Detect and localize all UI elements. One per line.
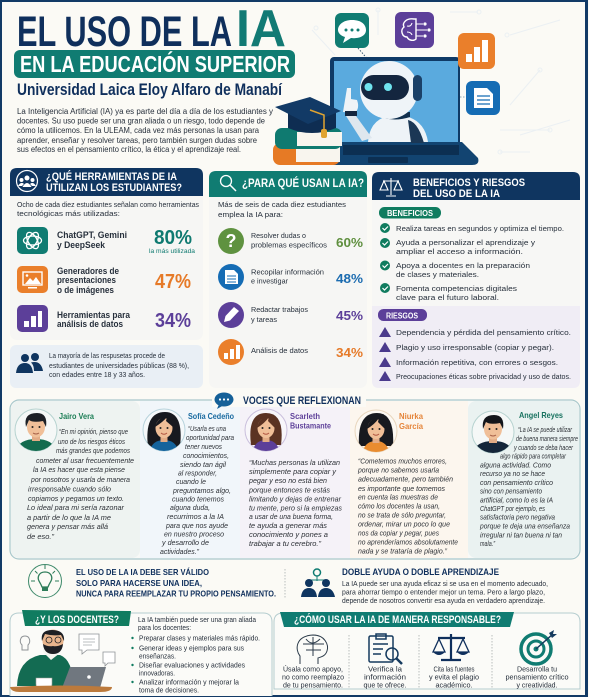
panel header [209, 171, 367, 197]
avatar [472, 411, 514, 456]
quote: uno de los riesgos éticos [58, 437, 125, 446]
section: riesgos: Dependencia y pérdida del pensamiento crítico. [396, 328, 571, 337]
row: recopilar: Recopilar información [251, 270, 324, 276]
quote: artificial, como lo es la IA [480, 496, 553, 504]
quote: alguna actividad. Como [480, 460, 551, 470]
quote: “Cometemos muchos errores, [358, 456, 447, 466]
icon: document [466, 81, 500, 115]
quote: Lo ideal para mi sería razonar [27, 503, 124, 512]
quote: satisfactoria pero negativa [480, 512, 555, 522]
row: análisis: Herramientas para [57, 310, 130, 320]
quote: “En mi opinión, pienso que [59, 427, 128, 436]
quote: preguntamos algo, [172, 486, 231, 495]
quote: en cuenta las muestras de [358, 492, 438, 502]
row: generadores: o de imágenes [57, 285, 114, 295]
icon: two people [301, 569, 335, 597]
avatar [245, 409, 287, 454]
quote: de eso.” [27, 532, 54, 541]
quote: con pensamiento crítico [480, 478, 553, 487]
text and bullet list: Diseñar evaluaciones y actividades [139, 662, 245, 670]
intro text [218, 200, 346, 219]
intro paragraph: sus efectos en el pensamiento crítico, la ética y el aprendizaje real. [17, 145, 241, 154]
avatar [355, 410, 397, 455]
row: ChatGPT: la más utilizada [149, 248, 195, 255]
item: cita las fuentes: Cita las fuentes [434, 664, 475, 674]
text: NUNCA PARA REEMPLAZAR TU PROPIO PENSAMIENTO. [76, 588, 276, 598]
name: Angel Reyes [519, 410, 563, 420]
text and bullet list: Generar ideas y ejemplos para sus [139, 646, 244, 652]
row: redactar: Redactar trabajos [251, 307, 309, 314]
section heading [214, 392, 361, 409]
row: análisis de datos [218, 339, 363, 365]
quote: ordenar, mirar un poco lo que [358, 520, 450, 528]
illustration: laptop, robot, books and app icons [273, 8, 570, 165]
name: García [399, 421, 423, 431]
row: resolver dudas: problemas específicos [251, 242, 328, 250]
quote: mala.” [480, 539, 495, 548]
quote: recurrimos a la IA [167, 512, 224, 521]
row: ChatGPT: 80% [154, 227, 192, 249]
text [342, 567, 548, 605]
quote: genera y pensar más allá [27, 522, 108, 531]
panel header: herramientas: UTILIZAN LOS ESTUDIANTES? [46, 182, 182, 194]
item: cita las fuentes: y evita el plagio [429, 672, 479, 682]
section: beneficios: de clases y materiales. [396, 270, 479, 279]
quote: limitando y dejas de entrenar [249, 494, 341, 504]
quote [248, 458, 342, 548]
intro text: Ocho de cada diez estudiantes señalan como herramientas [17, 200, 199, 209]
intro text: tecnológicas más utilizadas: [17, 209, 120, 218]
intro paragraph: docentes. Su uso puede ser una gran aliada o un riesgo, todo depende de [17, 116, 266, 126]
text: EL USO DE LA IA DEBE SER VÁLIDO [76, 567, 209, 577]
avatar [15, 409, 57, 454]
quote [357, 456, 458, 556]
illustration: teacher at laptop [10, 630, 115, 692]
section: beneficios: Apoya a docentes en la preparación [396, 261, 530, 270]
item: verifica la información: información [364, 672, 406, 682]
intro paragraph: cómo la utilicemos. En la ULEAM, cada vez más personas la usan para [17, 126, 260, 135]
section: beneficios: Fomenta competencias digitales [396, 284, 517, 293]
icon: laptop [322, 57, 478, 165]
row: generadores: Generadores de [57, 266, 119, 276]
row: recopilar: e investigar [251, 278, 289, 286]
row: análisis: 34% [155, 310, 191, 332]
quote: cuando le [176, 477, 206, 486]
quote: tener nuevos [185, 442, 222, 451]
quote: “Muchas personas la utilizan [249, 458, 340, 467]
item: pensamiento crítico [506, 630, 568, 690]
intro paragraph: La Inteligencia Artificial (IA) ya es parte del día a día de los estudiantes y [17, 107, 273, 116]
section heading: VOCES QUE REFLEXIONAN [243, 395, 361, 407]
row: generadores: 47% [155, 271, 191, 293]
section: riesgos: Información repetitiva, con errores o sesgos. [396, 358, 558, 367]
quote: pegar y eso no está bien [248, 476, 327, 485]
row: recopilar: 48% [336, 271, 363, 286]
text and bullet list: Preparar clases y materiales más rápido. [139, 636, 260, 642]
icon: chat [335, 13, 369, 48]
item: úsala como apoyo: no como reemplazo [282, 672, 344, 682]
quote: cómo los docentes la usan, [358, 502, 440, 510]
icon: light bulb [28, 564, 62, 598]
testimonial: Niurka García [355, 410, 458, 556]
panel header: ¿PARA QUÉ USAN LA IA? [242, 175, 364, 190]
section: beneficios: Ayuda a personalizar el aprendizaje y [396, 238, 535, 247]
quote: siendo tan ágil [180, 460, 226, 469]
quote: conocimientos, [183, 451, 229, 460]
text and bullet list: para los docentes: [138, 625, 191, 632]
name: Bustamante [290, 420, 331, 430]
panel header: DEL USO DE LA IA [413, 188, 500, 200]
item: úsala como apoyo [282, 635, 344, 690]
item: pensamiento crítico: pensamiento crítico [506, 672, 568, 682]
intro paragraph [17, 107, 273, 154]
section: riesgos [372, 306, 580, 388]
section: beneficios: clave para el futuro laboral. [396, 293, 499, 302]
row: análisis de datos: Análisis de datos [251, 348, 309, 355]
quote: cometer al usar frecuentemente [36, 456, 134, 465]
quote: irregular ni tan buena ni tan [480, 530, 562, 540]
panel: beneficios y riesgos [372, 172, 580, 388]
text: DOBLE AYUDA O DOBLE APRENDIZAJE [342, 567, 499, 577]
panel header: BENEFICIOS Y RIESGOS [413, 177, 525, 189]
section: riesgos: RIESGOS [386, 312, 419, 320]
quote: al responder, [178, 468, 217, 478]
callout: perfil de respuestas [10, 345, 203, 388]
quote: y desarrollo de [161, 538, 209, 547]
panel header [372, 172, 580, 200]
item: úsala como apoyo: Úsala como apoyo, [283, 664, 343, 674]
banner: ¿Y LOS DOCENTES? [35, 614, 119, 626]
text and bullet list: La IA también puede ser una gran aliada [138, 617, 256, 624]
quote: conocimiento y pones a [249, 530, 328, 539]
panel header: herramientas: ¿QUÉ HERRAMIENTAS DE IA [46, 170, 177, 183]
icon: brain circuit [395, 12, 434, 48]
quote: copiamos y pegamos un texto. [28, 494, 124, 503]
item: verifica la información: Verifica la [368, 664, 402, 674]
row: resolver dudas: 60% [336, 235, 363, 250]
text and bullet list: enseñanzas. [139, 654, 176, 660]
quote: es importante que tomemos [358, 484, 445, 493]
section: beneficios: Realiza tareas en segundos y optimiza el tiempo. [396, 224, 564, 233]
title block [14, 0, 295, 99]
quote: adecuadamente, pero también [358, 474, 453, 484]
quote: por nosotros y usarla de manera [30, 475, 130, 484]
panel: y los docentes [10, 610, 272, 696]
quote: a usar de una buena forma, [249, 512, 333, 521]
text [49, 351, 189, 379]
intro text: Más de seis de cada diez estudiantes [218, 200, 346, 209]
quote: te ayuda a generar más [249, 521, 327, 530]
section: beneficios: BENEFICIOS [387, 209, 434, 218]
name [290, 411, 331, 430]
text: La IA puede ser una ayuda eficaz si se usa en el momento adecuado, [342, 581, 548, 588]
row: análisis de datos: 34% [336, 345, 363, 360]
text and bullet list [131, 617, 260, 694]
panel: cómo usar la IA de manera responsable [274, 612, 580, 690]
quote: oportunidad para [186, 433, 234, 442]
banner [22, 610, 131, 626]
panel: para qué usan la IA [209, 171, 367, 388]
panel header: herramientas [10, 168, 203, 196]
quote: nada y se trataría de plagio.” [358, 546, 447, 556]
subtitle pill: EN LA EDUCACIÓN SUPERIOR [20, 50, 290, 77]
quote: no aprenderíamos absolutamente [358, 538, 458, 546]
quote: más grandes que podemos [56, 446, 130, 455]
text [76, 567, 276, 598]
name: Niurka [399, 411, 423, 421]
item: úsala como apoyo: de tu pensamiento. [283, 680, 343, 690]
quote: cuando tenemos [172, 494, 224, 504]
quote: recurso ya no se hace [480, 469, 545, 478]
avatar [143, 409, 185, 454]
item: cita las fuentes: académico. [436, 680, 472, 690]
icon: people [16, 353, 43, 373]
row: recopilar [218, 264, 363, 290]
row: ChatGPT [17, 227, 195, 255]
text: depende de nosotros convertir esa ayuda en verdadero aprendizaje. [342, 598, 545, 605]
row: resolver dudas: ? [226, 231, 236, 251]
quote: porque te deja una enseñanza [479, 522, 570, 530]
quote [479, 425, 578, 548]
panel: voces que reflexionan [10, 392, 580, 559]
text and bullet list: toma de decisiones. [139, 688, 199, 694]
row: análisis [17, 305, 191, 332]
quote: algo rápido para completar [500, 452, 566, 460]
row: resolver dudas: Resolver dudas o [251, 233, 306, 240]
quote: “Usarla es una [188, 424, 226, 433]
text and bullet list: innovadoras. [139, 670, 175, 678]
quote: trabajar a tu cerebro.” [249, 539, 321, 548]
item: pensamiento crítico: Desarrolla tu [517, 664, 557, 674]
title: EL USO DE LA IA: IA [236, 0, 286, 58]
row: redactar: 45% [336, 308, 363, 323]
item: pensamiento crítico: y creatividad. [516, 680, 558, 690]
row: ChatGPT: ChatGPT, Gemini [57, 230, 127, 240]
quote [27, 427, 134, 541]
university name: Universidad Laica Eloy Alfaro de Manabí [17, 80, 283, 99]
row: redactar [218, 302, 363, 328]
banner [280, 612, 514, 627]
item: verifica la información: que te ofrece. [364, 680, 406, 690]
section: riesgos: Preocupaciones éticas sobre privacidad y uso de datos. [396, 372, 571, 381]
quote: simplemente para copiar y [249, 467, 337, 476]
section: riesgos: Plagio y uso irresponsable (copiar y pegar). [396, 343, 554, 352]
row: resolver dudas [218, 228, 363, 254]
quote: porque no sabemos usarla [357, 466, 439, 474]
testimonial: Angel Reyes [472, 410, 578, 548]
quote: alguna duda, [170, 503, 210, 512]
intro paragraph: aprender, enseñar y resolver tareas, pero también surgen dudas sobre [17, 136, 258, 145]
section: beneficios [379, 207, 564, 302]
quote: nos da copiar y pegar, pues [358, 528, 439, 538]
banner: ¿CÓMO USAR LA IA DE MANERA RESPONSABLE? [294, 613, 501, 626]
item: verifica la información [364, 634, 406, 690]
quote: la IA es hacer que esta piense [33, 465, 125, 474]
intro text: emplea la IA para: [218, 210, 283, 219]
row: análisis: análisis de datos [57, 319, 123, 329]
text: SOLO PARA HACERSE UNA IDEA, [76, 578, 202, 588]
quote: actividades.” [160, 547, 199, 556]
name [399, 411, 423, 431]
tip: uso válido [28, 564, 276, 598]
icon: graduation cap and books [273, 97, 342, 165]
quote: no se trata de sólo preguntar, [358, 510, 446, 520]
text and bullet list: Analizar información y mejorar la [139, 680, 239, 686]
row: generadores [17, 266, 191, 295]
testimonial: Sofía Cedeño [143, 409, 234, 556]
quote: irresponsable cuando sólo [28, 484, 111, 494]
text: con edades entre 18 y 33 años. [49, 370, 145, 379]
title: EL USO DE LA IA: EL USO DE LA [17, 8, 232, 56]
icon: robot [343, 61, 428, 143]
testimonial: Jairo Vera [15, 409, 134, 541]
text: para ahorrar tiempo o entender mejor un tema. Pero a largo plazo, [342, 590, 545, 596]
name: Scarleth [290, 411, 320, 421]
quote: porque entonces te estás [248, 486, 330, 494]
name: Sofía Cedeño [188, 411, 234, 421]
row: ChatGPT: y DeepSeek [57, 240, 105, 250]
quote: sino con pensamiento [480, 486, 542, 496]
quote: para que nos ayude [165, 521, 228, 530]
quote: ChatGPT por ejemplo, es [480, 504, 545, 513]
section: beneficios: ampliar el acceso a información. [396, 247, 523, 256]
quote: en nuestro proceso [164, 530, 224, 538]
row: redactar: y tareas [251, 317, 278, 324]
intro text [17, 200, 199, 218]
quote: tu mente, pero si la empiezas [249, 504, 342, 512]
quote [160, 424, 234, 556]
name: Jairo Vera [59, 411, 94, 421]
item: cita las fuentes [429, 634, 479, 690]
testimonial: Scarleth Bustamante [245, 409, 342, 548]
panel: herramientas [10, 168, 203, 340]
icon: bar chart [458, 33, 495, 69]
row: generadores: presentaciones [57, 275, 116, 285]
text: La mayoría de las respusetas procede de [49, 351, 165, 360]
quote: a partir de lo que la IA me [27, 513, 111, 522]
text: estudiantes de universidades públicas (88 %), [49, 361, 189, 370]
tip: doble ayuda [301, 567, 548, 605]
